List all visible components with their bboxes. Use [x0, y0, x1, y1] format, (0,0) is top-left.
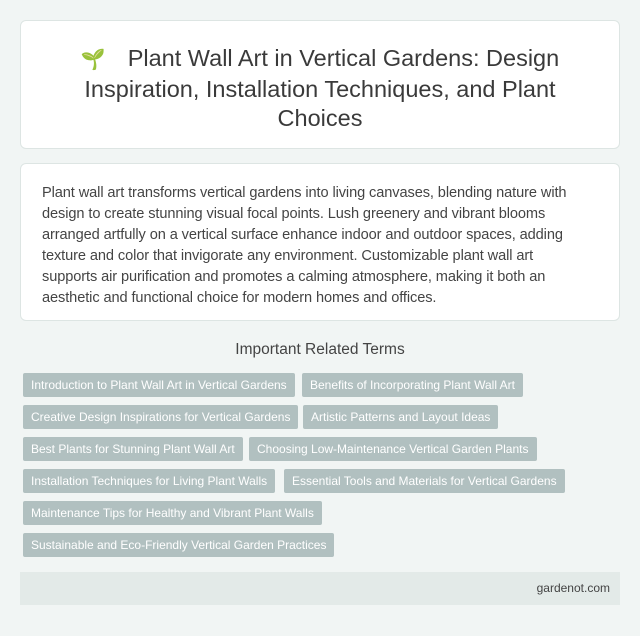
tags: Maintenance Tips for Healthy and Vibrant Plant Walls [31, 506, 314, 520]
footer: gardenot.com [537, 581, 610, 595]
title card [20, 20, 620, 149]
tags: Introduction to Plant Wall Art in Vertical Gardens [31, 378, 287, 392]
tags: Creative Design Inspirations for Vertical Gardens [31, 410, 290, 424]
tags: Sustainable and Eco-Friendly Vertical Garden Practices [31, 538, 326, 552]
section heading: Important Related Terms [235, 341, 405, 358]
description text: design to create stunning visual focal points. Lush greenery and vibrant blooms [42, 206, 545, 222]
description text [42, 185, 566, 306]
tags: Installation Techniques for Living Plant Walls [31, 474, 267, 488]
description text: aesthetic and functional choice for modern homes and offices. [42, 290, 436, 306]
tags: Essential Tools and Materials for Vertical Gardens [292, 474, 557, 488]
title: 🌱 Plant Wall Art in Vertical Gardens: Design Inspiration, Installation Techniques, and Plant Choices [81, 45, 559, 131]
tags: Artistic Patterns and Layout Ideas [311, 410, 490, 424]
description text: texture and color that invigorate any environment. Customizable plant wall art [42, 248, 533, 264]
tags: Benefits of Incorporating Plant Wall Art [310, 378, 515, 392]
description text: supports air purification and promotes a calming atmosphere, making it both an [42, 269, 545, 285]
description text: Plant wall art transforms vertical gardens into living canvases, blending nature with [42, 185, 566, 201]
tags: Choosing Low-Maintenance Vertical Garden Plants [257, 442, 528, 456]
description card [20, 163, 620, 321]
description text: arranged artfully on a vertical surface enhance indoor and outdoor spaces, adding [42, 227, 563, 243]
tags: Best Plants for Stunning Plant Wall Art [31, 442, 235, 456]
footer [20, 572, 620, 605]
